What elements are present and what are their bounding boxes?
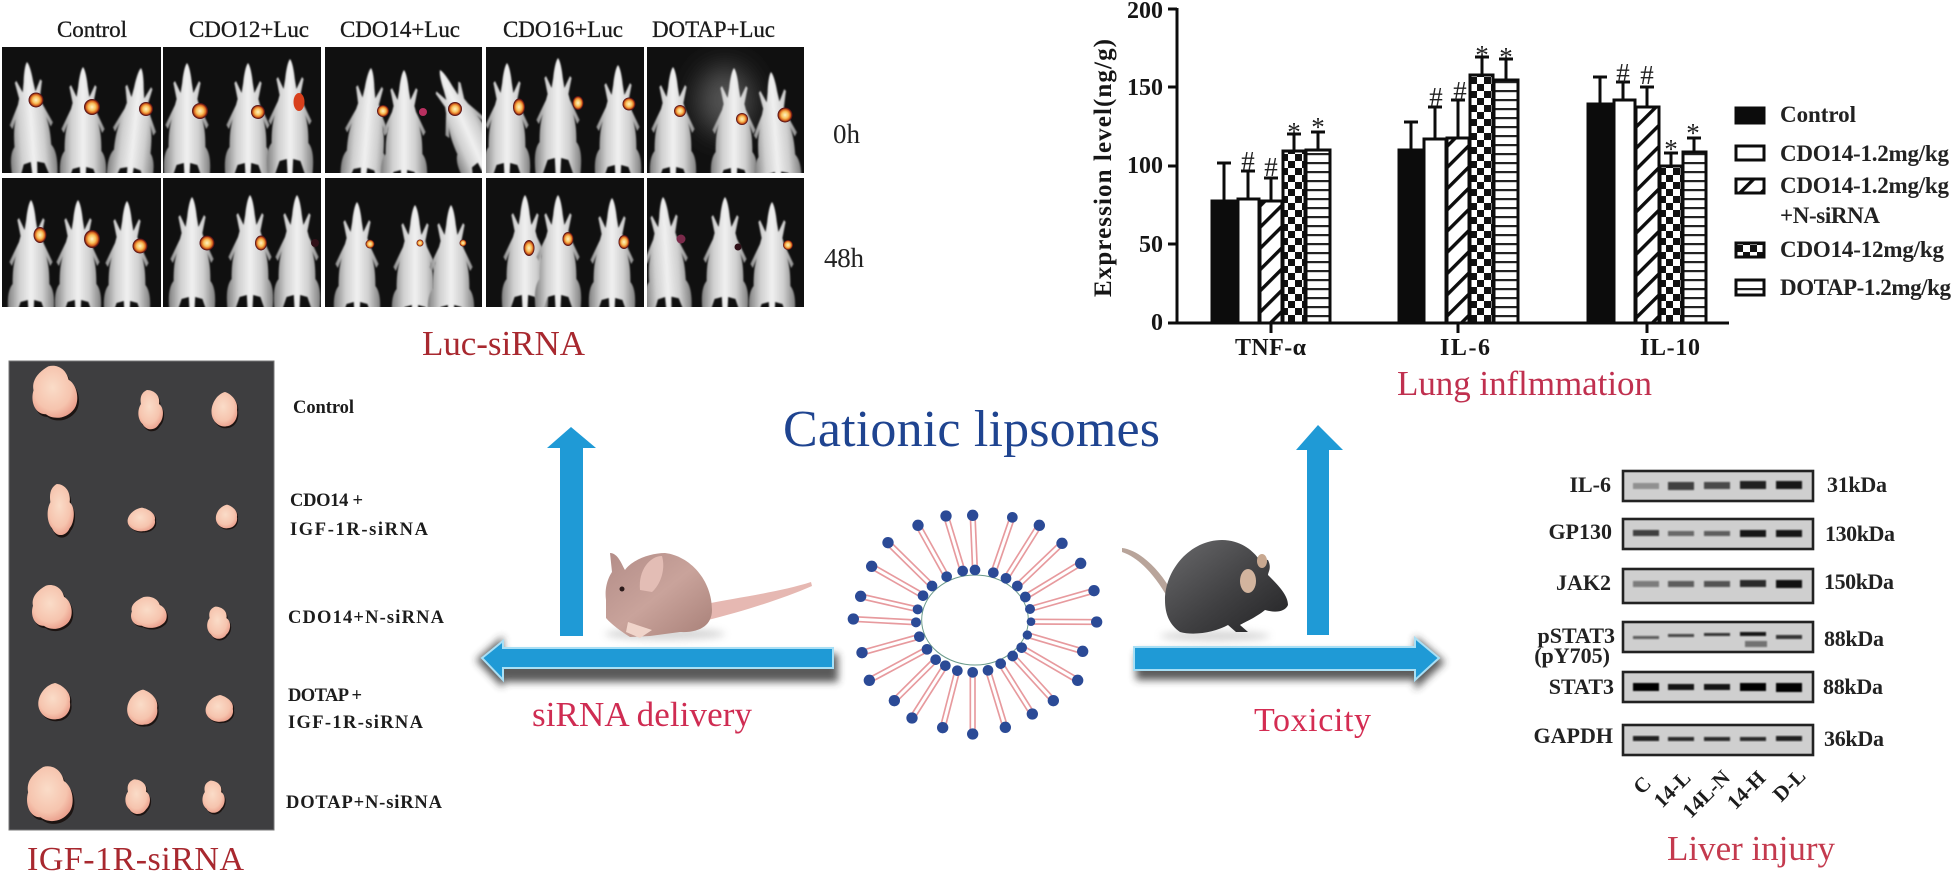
significance marks: * <box>1499 42 1513 72</box>
column labels: CDO12+Luc <box>189 17 309 42</box>
row: STAT3 <box>1549 672 1883 702</box>
legend: +N-siRNA <box>1780 203 1880 228</box>
image: CDO12 0h <box>163 47 321 173</box>
significance marks: # <box>1616 58 1630 88</box>
image: CDO12 48h <box>163 178 321 307</box>
lane labels: 14L-N <box>1677 765 1735 823</box>
row: STAT3: STAT3 <box>1549 674 1614 699</box>
group labels: DOTAP+N-siRNA <box>286 793 443 813</box>
lane labels: C <box>1628 771 1656 799</box>
vesicle membrane <box>922 575 1028 665</box>
column labels: CDO14+Luc <box>340 17 460 42</box>
legend <box>1736 102 1952 300</box>
x tick labels <box>1235 335 1700 361</box>
legend: CDO14-12mg/kg <box>1780 237 1944 262</box>
y axis <box>1168 8 1729 333</box>
caption: Lung inflmmation: Lung inflmmation <box>1397 364 1652 403</box>
row: JAK2: JAK2 <box>1556 570 1611 595</box>
column labels: Control <box>57 17 127 42</box>
label: siRNA delivery: siRNA delivery <box>532 695 752 734</box>
column labels: DOTAP+Luc <box>652 17 775 42</box>
time label 0h: 0h <box>833 119 860 149</box>
panel: western blots <box>1534 471 1895 823</box>
row: GP130: GP130 <box>1548 519 1612 544</box>
lipid tails <box>853 515 1097 734</box>
row: STAT3: 88kDa <box>1823 674 1883 699</box>
caption: Luc-siRNA: Luc-siRNA <box>422 324 586 363</box>
significance marks: * <box>1475 40 1489 70</box>
photo with tumors <box>9 361 274 830</box>
legend: Control <box>1780 102 1856 127</box>
arrow: left up <box>547 427 596 636</box>
row: pSTAT3: (pY705) <box>1534 643 1610 668</box>
group labels <box>286 398 445 813</box>
significance marks: # <box>1429 82 1443 112</box>
legend: CDO14-1.2mg/kg <box>1780 173 1950 198</box>
image: Control 48h <box>2 178 161 307</box>
row: pSTAT3: pSTAT3 <box>1538 623 1615 648</box>
chart: cytokine expression <box>1090 0 1952 361</box>
significance marks: * <box>1686 118 1700 148</box>
arrow: left horizontal <box>476 636 838 688</box>
row: GAPDH <box>1534 723 1884 755</box>
lane labels <box>1628 764 1810 823</box>
x tick labels: TNF-α <box>1235 335 1307 361</box>
x tick labels: IL-10 <box>1640 335 1700 361</box>
y axis title: Expression level(ng/g) <box>1090 39 1117 297</box>
row: GP130 <box>1548 519 1895 549</box>
row: GP130: 130kDa <box>1825 521 1895 546</box>
lane labels: 14-L <box>1649 766 1695 812</box>
group labels: DOTAP + <box>288 686 362 706</box>
title: Cationic lipsomes: Cationic lipsomes <box>783 401 1160 458</box>
panel: tumor photo <box>9 361 445 830</box>
time label 48h: 48h <box>824 243 864 273</box>
y tick labels: 150 <box>1127 75 1163 101</box>
image: CDO14 48h <box>325 178 482 307</box>
bars: TNF-alpha <box>1212 132 1330 323</box>
arrow: right horizontal <box>1134 636 1445 690</box>
significance marks: # <box>1241 146 1255 176</box>
y tick labels: 0 <box>1151 310 1163 336</box>
group labels: IGF-1R-siRNA <box>290 520 429 540</box>
group labels: CDO14 + <box>290 491 363 511</box>
significance marks <box>1241 40 1700 182</box>
image: Control 0h <box>2 47 161 173</box>
row: JAK2 <box>1556 569 1894 603</box>
panel: Luc-siRNA imaging <box>2 17 864 321</box>
icon: black mouse <box>1122 540 1288 641</box>
label: Toxicity: Toxicity <box>1254 702 1371 739</box>
bars: IL-10 <box>1588 77 1706 323</box>
row: GAPDH: 36kDa <box>1824 726 1884 751</box>
row: JAK2: 150kDa <box>1824 569 1894 594</box>
group labels: CDO14+N-siRNA <box>288 608 445 628</box>
x tick labels: IL-6 <box>1440 335 1490 361</box>
row: pSTAT3 <box>1534 622 1884 668</box>
significance marks: # <box>1640 60 1654 90</box>
row: IL-6: IL-6 <box>1569 472 1611 497</box>
diagram: liposome <box>848 510 1102 740</box>
column labels <box>57 17 775 42</box>
row: GAPDH: GAPDH <box>1534 723 1613 748</box>
row: IL-6 <box>1569 471 1887 501</box>
image: DOTAP 48h <box>647 178 804 307</box>
significance marks: # <box>1453 76 1467 106</box>
lane labels: D-L <box>1768 764 1810 806</box>
legend: CDO14-1.2mg/kg <box>1780 141 1950 166</box>
row: IL-6: 31kDa <box>1827 472 1887 497</box>
group labels: Control <box>293 398 354 418</box>
inner lipid heads <box>911 565 1035 678</box>
image: CDO16 48h <box>486 178 644 307</box>
image: CDO16 0h <box>486 47 644 173</box>
lane labels: 14-H <box>1722 766 1770 814</box>
caption: IGF-1R-siRNA: IGF-1R-siRNA <box>27 841 244 878</box>
significance marks: * <box>1664 134 1678 164</box>
row: pSTAT3: 88kDa <box>1824 626 1884 651</box>
column labels: CDO16+Luc <box>503 17 623 42</box>
significance marks: # <box>1264 152 1278 182</box>
y tick labels <box>1127 0 1163 336</box>
significance marks: * <box>1287 117 1301 147</box>
image: DOTAP 0h <box>647 47 804 173</box>
y tick labels: 100 <box>1127 153 1163 179</box>
legend: DOTAP-1.2mg/kg <box>1780 275 1952 300</box>
arrow: right up <box>1296 425 1343 635</box>
bars: IL-6 <box>1399 57 1518 323</box>
outer lipid heads <box>848 510 1102 740</box>
icon: nude mouse <box>605 553 812 640</box>
significance marks: * <box>1311 112 1325 142</box>
y tick labels: 50 <box>1139 232 1163 258</box>
caption: Liver injury: Liver injury <box>1667 829 1836 868</box>
group labels: IGF-1R-siRNA <box>288 713 424 733</box>
image: CDO14 0h <box>325 47 482 173</box>
